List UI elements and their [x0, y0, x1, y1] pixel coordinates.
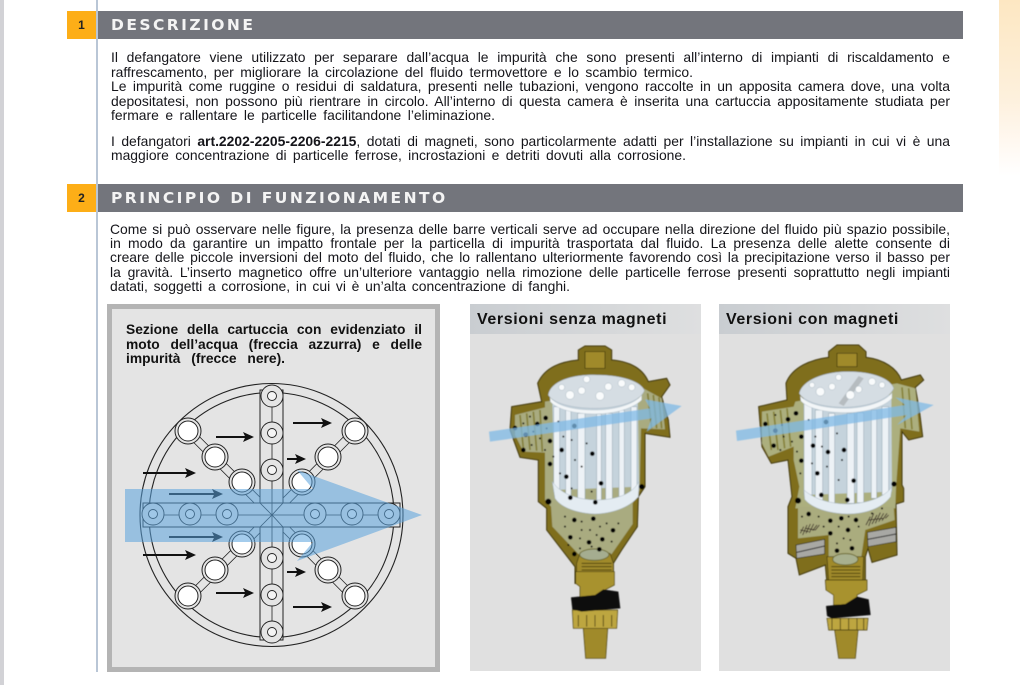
text block: operating principle — [110, 221, 950, 294]
panel: version with magnets — [719, 304, 950, 671]
left grey page edge — [0, 0, 4, 685]
panel caption: cartridge section: Sezione della cartuccia con evidenziato il — [126, 322, 422, 337]
heading: principio di funzionamento — [98, 184, 963, 212]
small rod circles — [142, 385, 400, 643]
impurity dots — [513, 416, 644, 556]
panel heading: con magneti: Versioni con magneti — [726, 311, 899, 328]
right orange gradient strip — [999, 0, 1020, 176]
vertical rule — [96, 0, 98, 672]
black impurity arrows — [143, 423, 330, 607]
heading: descrizione: DESCRIZIONE — [111, 16, 255, 34]
lower nut and hose barb — [825, 580, 867, 605]
heading: principio di funzionamento: PRINCIPIO DI FUNZIONAMENTO — [111, 189, 448, 207]
water cavity — [515, 387, 665, 554]
cartridge rods — [552, 397, 639, 490]
thread hatching — [767, 387, 912, 450]
text block: description: I defangatori art.2202-2205-2206-2215, dotati di magneti, sono particolarmente adatti per l’installazione su impianti in cui vi è una — [111, 133, 950, 149]
cartridge top disc — [799, 372, 894, 407]
text block: description: Il defangatore viene utilizzato per separare dall’acqua le impurità che sono presenti all’interno di impianti di riscaldamento e — [111, 49, 950, 65]
text block: description — [111, 49, 950, 163]
thread hatching — [520, 393, 662, 452]
cartridge top disc — [548, 375, 644, 408]
large tube circles — [175, 418, 368, 609]
brass body — [759, 345, 924, 583]
section 2 number badge: 2 — [78, 191, 85, 205]
blue flow arrow — [489, 399, 682, 442]
blue water flow arrow — [125, 470, 422, 561]
text block: operating principle: creare delle piccole inversioni del moto del fluido, che lo rallentano ulteriormente favorendo così la precipitazione verso il basso per — [110, 249, 950, 265]
panel heading: senza magneti — [470, 304, 701, 334]
text block: description: fermare e rallentare le particelle facilitandone l’eliminazione. — [111, 107, 495, 123]
lower nut and hose barb — [576, 572, 614, 598]
text block: description: depositatesi, non possono più rientrare in circolo. All’interno di questa camera è inserita una cartuccia appositamente studiata per — [111, 93, 950, 109]
text block: description: maggiore concentrazione di particelle ferrose, incrostazioni e detriti dovuti alla corrosione. — [111, 147, 686, 163]
panel: version without magnets — [470, 304, 701, 671]
text block: description: Le impurità come ruggine o residui di saldatura, presenti nelle tubazioni, vengono raccolte in un apposita camera dove, una volta — [111, 78, 950, 94]
section 1 number badge: 1 — [78, 18, 85, 32]
cross bars — [143, 390, 400, 640]
panel caption: cartridge section: impurità (frecce nere). — [126, 351, 285, 366]
iron filings — [800, 513, 889, 535]
panel: cartridge section — [107, 304, 440, 672]
threaded neck — [827, 557, 864, 582]
panel caption: cartridge section — [126, 322, 422, 366]
heading: descrizione — [98, 11, 963, 39]
black handle — [571, 589, 620, 612]
cartridge lower disc — [804, 487, 892, 514]
water cavity — [762, 383, 919, 508]
impurity dots — [763, 411, 897, 553]
panel heading: con magneti — [719, 304, 950, 334]
cartridge rods — [804, 395, 892, 495]
panel heading: senza magneti: Versioni senza magneti — [477, 311, 667, 328]
text block: operating principle: Come si può osservare nelle figure, la presenza delle barre verticali serve ad occupare nella direzione del fluido più spazio possibile, — [110, 221, 950, 237]
text block: operating principle: la gravità. L’inserto magnetico offre un’ulteriore vantaggio nella rimozione delle particelle ferrose presenti soprattutto negli impianti — [110, 264, 950, 280]
cartridge lower disc — [552, 482, 639, 514]
panel caption: cartridge section: moto dell’acqua (freccia azzurra) e delle — [126, 337, 422, 352]
section 2 number badge — [67, 184, 96, 212]
top cap — [585, 352, 605, 368]
brass body — [510, 346, 670, 583]
threaded neck — [577, 553, 613, 577]
text block: description: raffrescamento, per migliorare la circolazione del fluido termovettore e lo scambio termico. — [111, 64, 693, 80]
magnets — [796, 527, 896, 558]
top cap — [837, 353, 857, 367]
section 1 number badge — [67, 11, 96, 39]
blue flow arrow — [736, 397, 934, 441]
outer ring — [140, 384, 403, 646]
black handle — [826, 597, 871, 618]
diagonal tube arms — [188, 431, 355, 599]
text block: operating principle: datati, soggetti a corrosione, in cui vi è un’alta concentrazione di fanghi. — [110, 278, 570, 294]
cartridge section diagram — [125, 384, 422, 646]
valve illustration with magnets — [736, 345, 934, 658]
text block: operating principle: in modo da garantire un impatto frontale per la particella di impurità trasportata dal fluido. La presenza delle alette consente di — [110, 235, 950, 251]
valve illustration without magnets — [489, 346, 682, 658]
